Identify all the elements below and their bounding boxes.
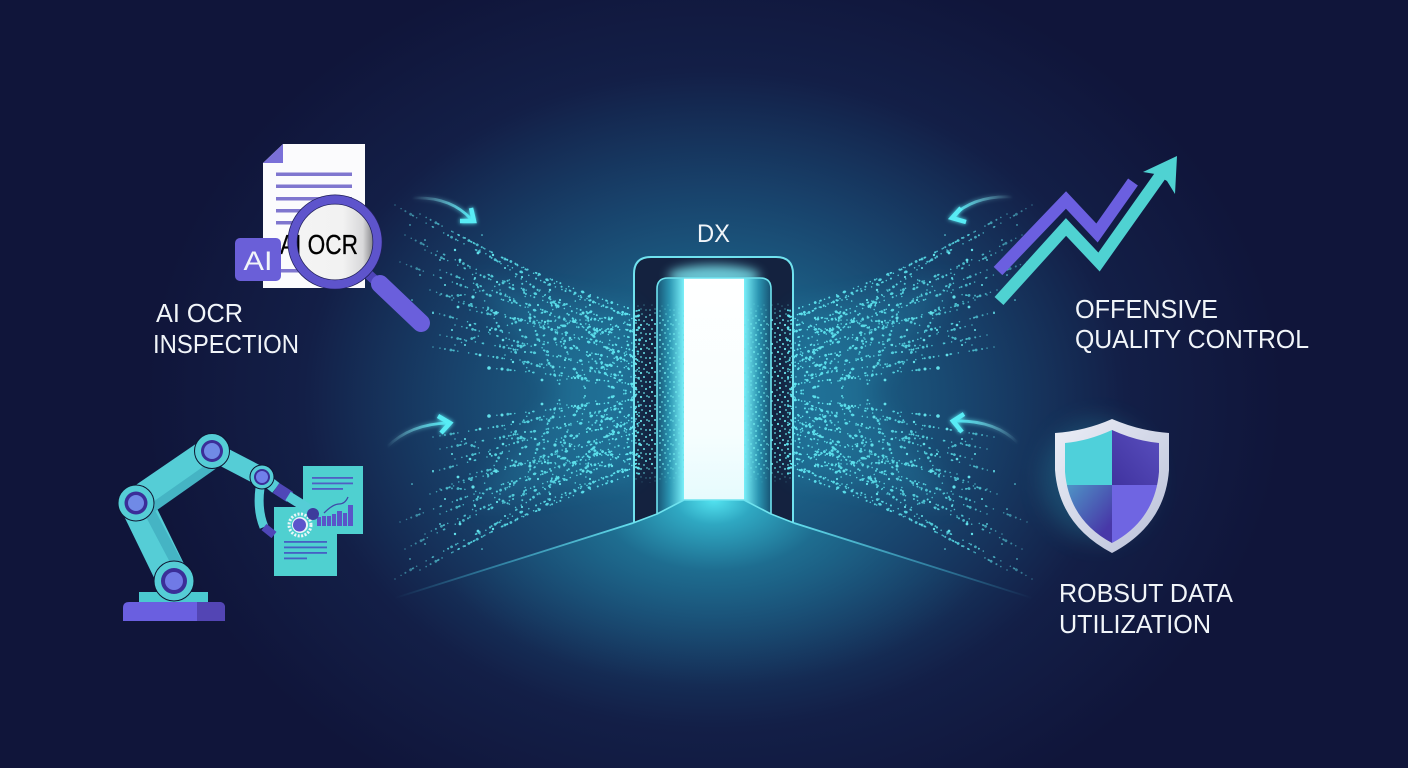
door edge lines (633, 278, 794, 523)
magnifier handle (366, 272, 421, 323)
gripper (307, 508, 319, 520)
dense particles at portal (635, 303, 793, 483)
icon: robot arm with documents (118, 434, 363, 621)
stream lower right (787, 390, 1032, 579)
label: AI OCR inspection (153, 298, 299, 359)
stream upper right (787, 205, 1032, 394)
teal line (999, 176, 1160, 301)
label: offensive quality control: OFFENSIVE (1075, 294, 1218, 324)
front document lines (284, 541, 327, 559)
chart trend line (324, 497, 348, 513)
label: offensive quality control: QUALITY CONTROL (1075, 324, 1309, 354)
robot arm segments (136, 451, 312, 581)
label: offensive quality control (1075, 294, 1309, 354)
central DX portal (395, 257, 1032, 720)
magnifier ring (292, 200, 378, 284)
document lines (276, 172, 352, 272)
back document (303, 466, 363, 534)
document fold (263, 144, 283, 163)
icon: AI OCR document with magnifier (235, 144, 421, 323)
light core (684, 278, 744, 500)
arrow: upper left (412, 198, 474, 221)
floor (395, 500, 1032, 720)
label: AI OCR inspection: INSPECTION (153, 329, 299, 359)
AI badge (235, 238, 281, 281)
icon: shield (1042, 419, 1169, 553)
label: robust data utilization (1059, 578, 1234, 639)
AI badge: AI (244, 246, 272, 276)
bar chart (317, 505, 353, 526)
soft haze right (793, 280, 958, 505)
back document lines (312, 477, 353, 490)
shield glow (1042, 420, 1154, 540)
portal outline (634, 257, 793, 523)
purple line (998, 182, 1133, 271)
portal inner door (657, 278, 771, 514)
label: AI OCR inspection: AI OCR (156, 298, 243, 328)
document (263, 144, 365, 288)
label: DX: DX (697, 220, 730, 248)
robot base (123, 592, 225, 621)
label: robust data utilization: ROBSUT DATA (1059, 578, 1234, 608)
gear (289, 514, 311, 536)
soft haze left (470, 280, 635, 505)
arrow: lower right (953, 414, 1018, 443)
particle streams (395, 205, 1032, 579)
shield quadrants (1065, 430, 1159, 543)
arrow: lower left (387, 416, 450, 447)
label: robust data utilization: UTILIZATION (1059, 609, 1211, 639)
stream upper left (395, 205, 640, 394)
joint: shoulder (118, 485, 154, 521)
front document (274, 507, 337, 576)
shield rim (1055, 419, 1169, 553)
teal arrowhead (1143, 156, 1177, 194)
arrow: upper right (952, 197, 1013, 222)
icon: rising chart arrows (998, 156, 1177, 301)
magnifier lens (295, 202, 375, 282)
joint: base (154, 561, 194, 601)
joint: elbow (194, 434, 230, 468)
glow inside frame top (668, 265, 760, 287)
text: AI OCR: AI OCR (280, 229, 358, 260)
stream lower left (395, 390, 640, 579)
joint: wrist (250, 465, 274, 489)
portal outer frame (634, 257, 793, 523)
floor boundary lines (395, 523, 1032, 598)
